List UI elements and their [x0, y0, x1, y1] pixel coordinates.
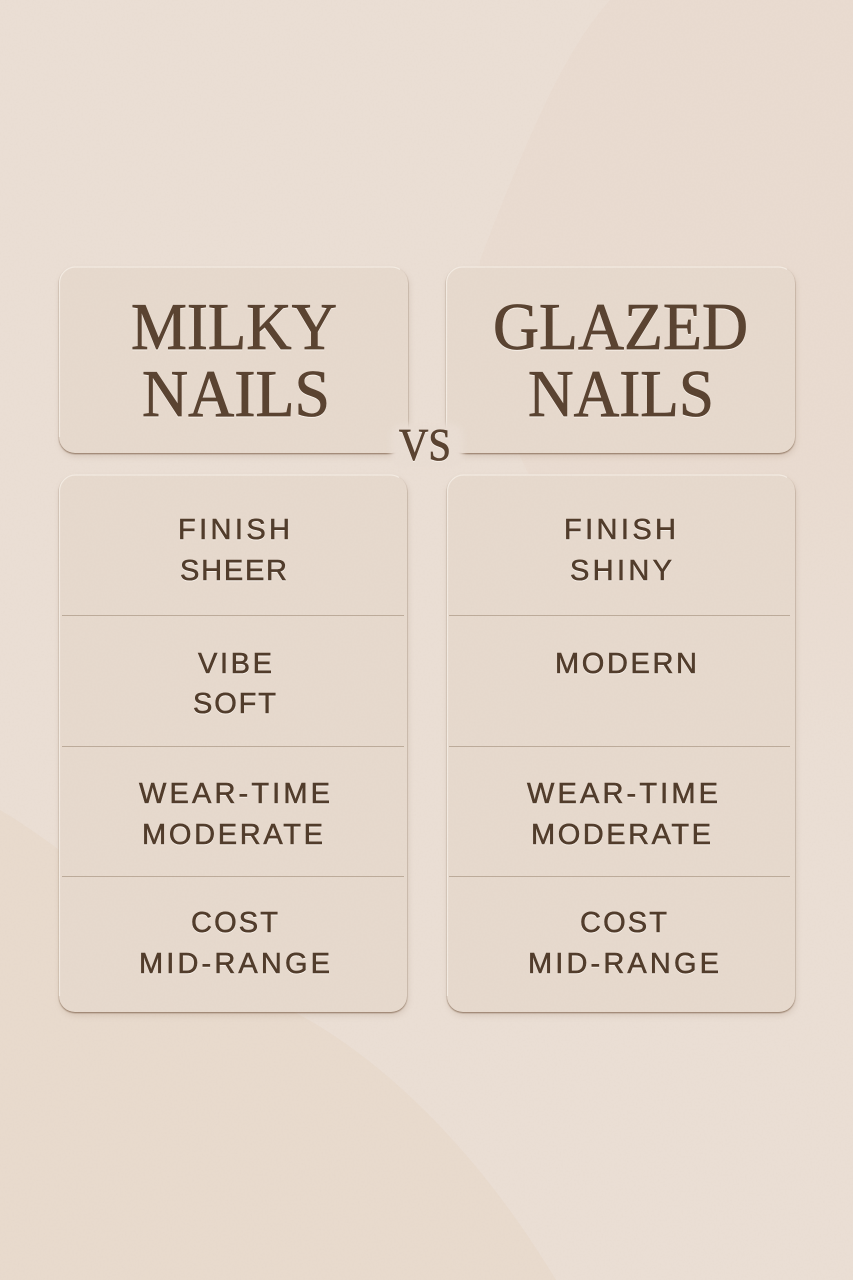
- glazed wear-time text: WEAR-TIME: [527, 778, 718, 810]
- milky finish text: SHEER: [180, 555, 287, 587]
- glazed vibe text: MODERN: [555, 648, 697, 680]
- heading: milky nails: [131, 290, 337, 431]
- panel: glazed nails attributes: [447, 475, 795, 1012]
- milky wear-time text: WEAR-TIME: [139, 778, 330, 810]
- milky wear-time text: MODERATE: [142, 819, 323, 851]
- milky finish text: FINISH: [178, 514, 290, 546]
- heading: milky nails: NAILS: [142, 357, 330, 431]
- heading: glazed nails: NAILS: [528, 357, 714, 431]
- milky wear-time text: [139, 778, 330, 851]
- milky cost text: COST: [191, 907, 278, 939]
- milky cost text: MID-RANGE: [139, 948, 330, 980]
- panel: milky nails header: [59, 267, 408, 453]
- glazed wear-time text: [527, 778, 718, 851]
- heading: glazed nails: [493, 290, 748, 431]
- glazed wear-time text: MODERATE: [531, 819, 711, 851]
- milky cost text: [139, 907, 330, 980]
- milky finish text: [178, 514, 290, 587]
- heading: milky nails: MILKY: [131, 290, 337, 364]
- milky vibe text: [193, 648, 276, 720]
- glazed finish text: FINISH: [564, 514, 676, 546]
- milky vibe text: VIBE: [198, 648, 272, 680]
- glazed cost text: [528, 907, 719, 980]
- glazed finish text: SHINY: [570, 555, 672, 587]
- milky vibe text: SOFT: [193, 688, 276, 720]
- glazed cost text: COST: [580, 907, 667, 939]
- heading: glazed nails: GLAZED: [493, 290, 748, 364]
- glazed cost text: MID-RANGE: [528, 948, 719, 980]
- panel: glazed nails header: [446, 267, 795, 453]
- vs badge: VS: [399, 420, 451, 470]
- panel: milky nails attributes: [59, 475, 407, 1012]
- glazed finish text: [564, 514, 676, 587]
